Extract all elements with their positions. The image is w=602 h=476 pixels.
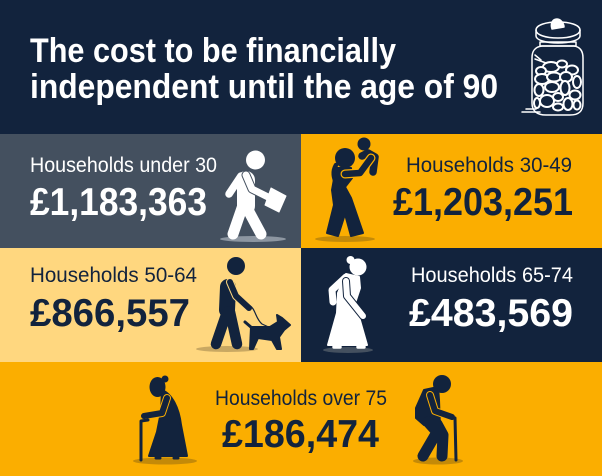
panel: households 65-74 bbox=[301, 248, 602, 362]
icon: elderly man with cane bbox=[413, 375, 463, 464]
icon: person walking dog bbox=[196, 257, 290, 352]
title bbox=[30, 32, 498, 106]
value: £866,557 bbox=[30, 292, 190, 335]
icon: elderly woman with cane bbox=[133, 376, 197, 464]
icon: walking person with briefcase bbox=[220, 150, 286, 242]
label: Households over 75 bbox=[215, 387, 387, 410]
icon: mother lifting baby bbox=[315, 138, 375, 242]
panel: households 30-49 bbox=[301, 134, 602, 248]
icon: jar of coins bbox=[522, 19, 583, 115]
title: independent until the age of 90 bbox=[30, 68, 498, 106]
value: £1,183,363 bbox=[30, 181, 207, 224]
value: £483,569 bbox=[409, 292, 573, 335]
title: The cost to be financially bbox=[30, 32, 396, 70]
header panel bbox=[0, 0, 602, 134]
value: £186,474 bbox=[222, 413, 379, 456]
value: £1,203,251 bbox=[393, 181, 573, 224]
label: Households 65-74 bbox=[411, 264, 573, 287]
label: Households under 30 bbox=[30, 154, 217, 177]
label: Households 30-49 bbox=[406, 154, 572, 177]
icon: elderly woman in dress bbox=[323, 256, 373, 353]
panel: households 50-64 bbox=[0, 248, 301, 362]
panel: households under 30 bbox=[0, 134, 301, 248]
label: Households 50-64 bbox=[30, 264, 197, 287]
panel: households over 75 bbox=[0, 362, 602, 476]
